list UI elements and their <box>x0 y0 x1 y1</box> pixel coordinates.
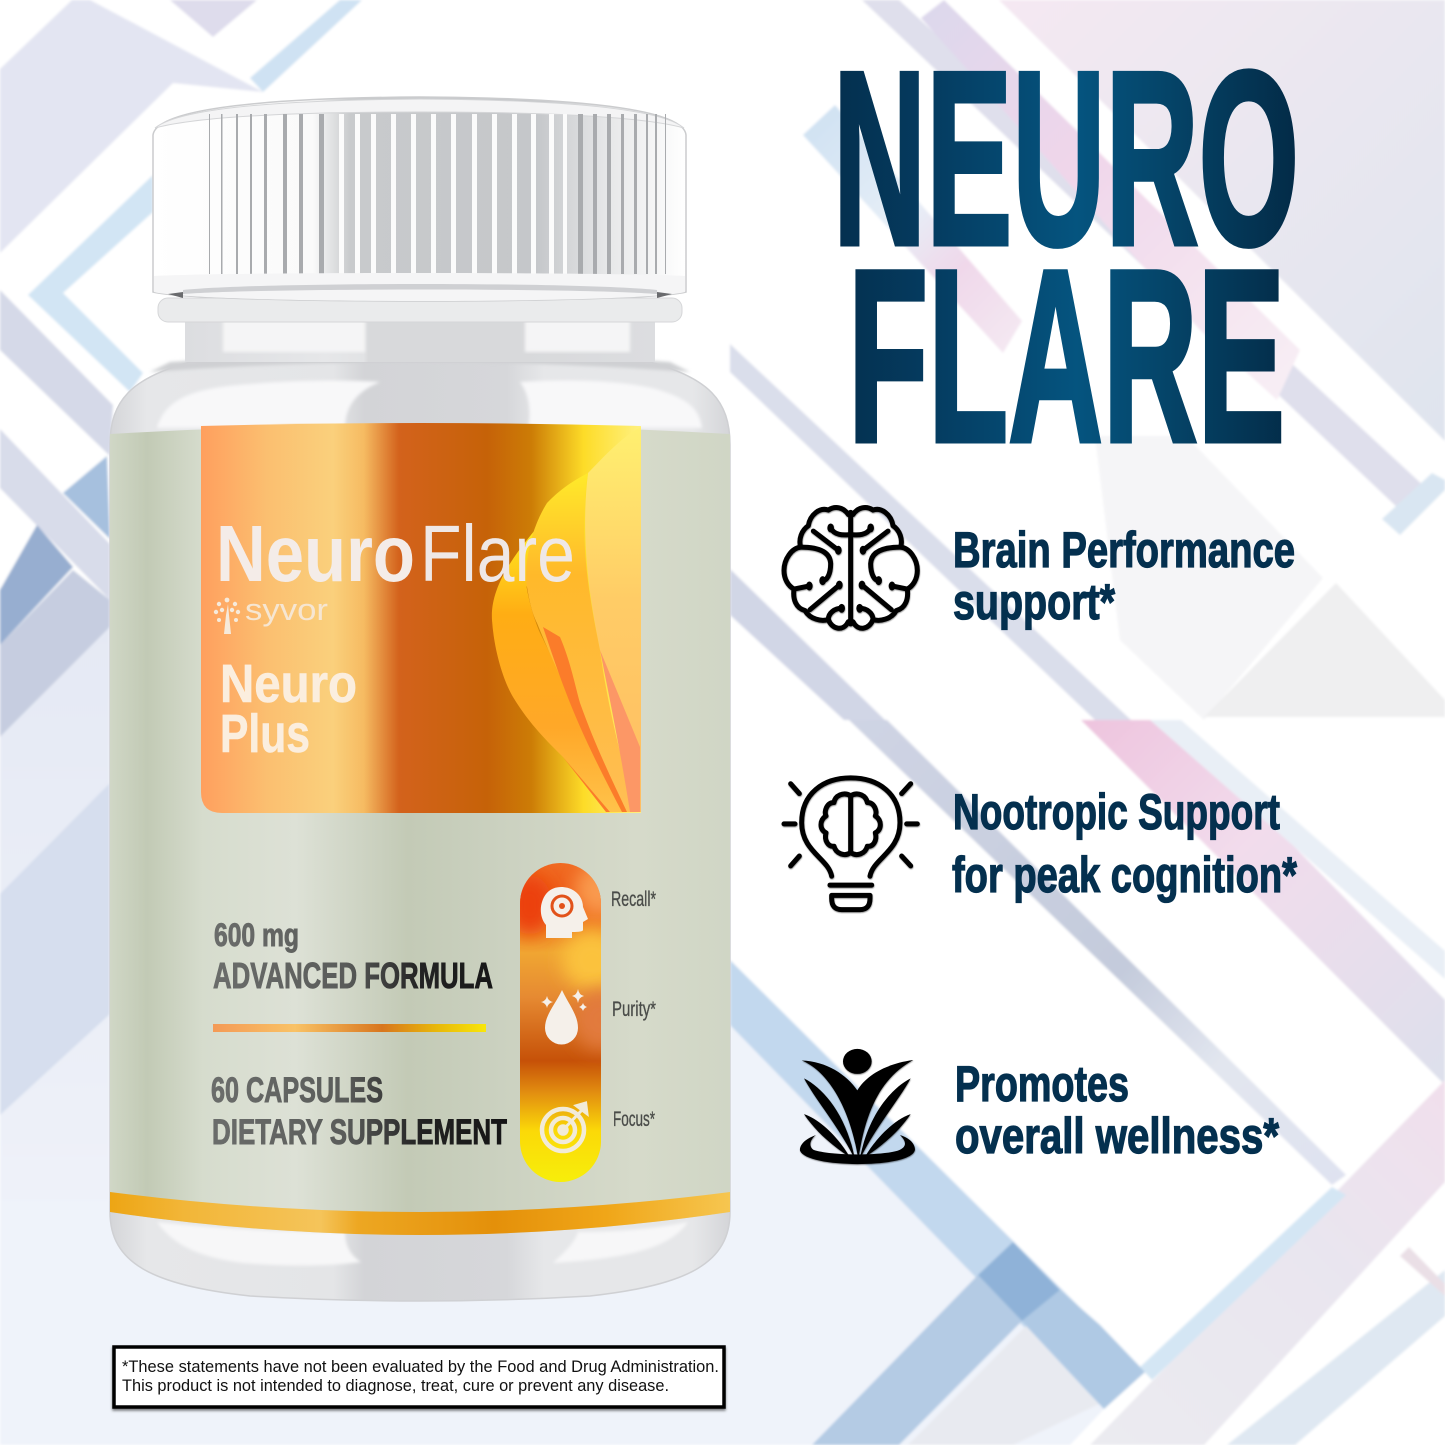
benefit text: overall wellness: overall wellness* <box>955 1108 1279 1164</box>
benefit text: overall wellness <box>955 1056 1279 1164</box>
gradient divider line <box>213 1024 486 1032</box>
label background <box>110 425 730 1235</box>
bottom highlights <box>157 1222 688 1266</box>
icon: wellness figure <box>800 1049 915 1164</box>
dose and formula text: 600 mg <box>214 917 299 953</box>
capsule count text: 60 CAPSULES <box>211 1071 383 1110</box>
title: NEURO FLARE <box>833 19 1299 494</box>
icon: target with arrow <box>542 1104 586 1151</box>
pill labels: Purity* <box>612 998 656 1021</box>
product name: Neuro <box>220 654 357 714</box>
disclaimer box <box>114 1347 724 1407</box>
orange label band <box>110 1192 730 1235</box>
icon: light bulb with brain <box>784 778 917 910</box>
company name syvor: syvor <box>245 592 328 627</box>
pill labels: Focus* <box>613 1108 655 1131</box>
benefit text: nootropic support: Nootropic Support <box>953 784 1280 840</box>
pill labels: Recall* <box>611 888 656 911</box>
icon: water drop with sparkles <box>541 989 587 1044</box>
bottle neck <box>185 300 655 362</box>
benefit text: brain performance <box>953 522 1295 630</box>
orange brand panel <box>201 423 641 813</box>
bottle body <box>110 362 730 1301</box>
disclaimer box: *These statements have not been evaluated by the Food and Drug Administration. <box>122 1358 719 1376</box>
neck highlights <box>223 318 630 352</box>
flame graphic <box>492 427 641 812</box>
product bottle <box>110 97 730 1301</box>
dose and formula text: ADVANCED FORMULA <box>213 955 493 996</box>
benefit text: brain performance: support* <box>953 574 1115 630</box>
brand name NeuroFlare: Neuro <box>216 509 415 598</box>
product name: Plus <box>220 704 310 764</box>
product name <box>220 654 357 764</box>
icon: brain circuit <box>784 508 917 628</box>
capsule count text: DIETARY SUPPLEMENT <box>212 1113 507 1152</box>
bottle cap <box>153 97 686 301</box>
dose and formula text <box>213 917 493 996</box>
shoulder highlights <box>150 353 702 428</box>
capsule count text <box>211 1071 507 1152</box>
pill labels <box>611 888 656 1131</box>
benefit text: nootropic support <box>952 784 1297 903</box>
disclaimer box: This product is not intended to diagnose, treat, cure or prevent any disease. <box>122 1377 669 1395</box>
benefit text: overall wellness: Promotes <box>955 1056 1129 1112</box>
pill glow highlights <box>520 866 601 1057</box>
icon: head with recall arrows <box>541 887 588 938</box>
benefit text: brain performance: Brain Performance <box>953 522 1295 578</box>
benefit pill <box>520 863 601 1182</box>
neck collar <box>158 298 682 322</box>
brand name NeuroFlare: Flare <box>420 509 575 598</box>
icon: syvor tree logo <box>214 598 240 634</box>
benefit text: nootropic support: for peak cognition* <box>952 847 1297 903</box>
